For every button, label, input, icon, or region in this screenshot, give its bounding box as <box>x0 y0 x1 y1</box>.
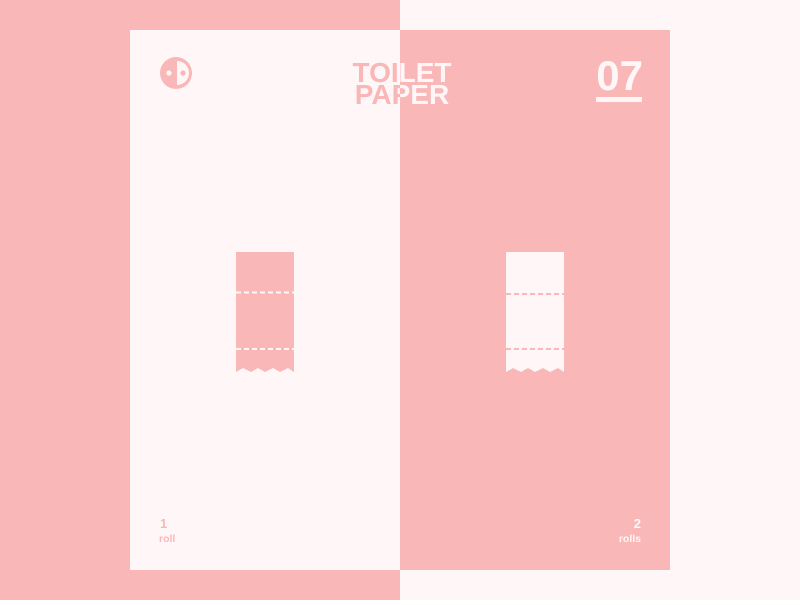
label: 2 rolls: rolls <box>619 533 641 545</box>
title: TOILET <box>352 57 452 88</box>
title: PAPER <box>355 79 449 110</box>
label: 1 roll: roll <box>159 533 175 545</box>
label: 2 rolls <box>619 516 641 545</box>
panel: left card <box>130 30 400 570</box>
label: 2 rolls: 2 <box>634 516 641 531</box>
title: TOILET <box>352 57 452 88</box>
title: PAPER <box>355 79 449 110</box>
background left <box>0 0 400 600</box>
title <box>352 62 452 104</box>
panel: right card <box>400 30 670 570</box>
number 07: 07 <box>596 52 643 99</box>
background right <box>400 0 800 600</box>
icon: two rolls <box>506 252 564 372</box>
label: 1 roll: 1 <box>160 516 167 531</box>
icon: one roll <box>236 252 294 372</box>
label: 1 roll <box>159 516 175 545</box>
icon: face logo <box>160 57 192 89</box>
